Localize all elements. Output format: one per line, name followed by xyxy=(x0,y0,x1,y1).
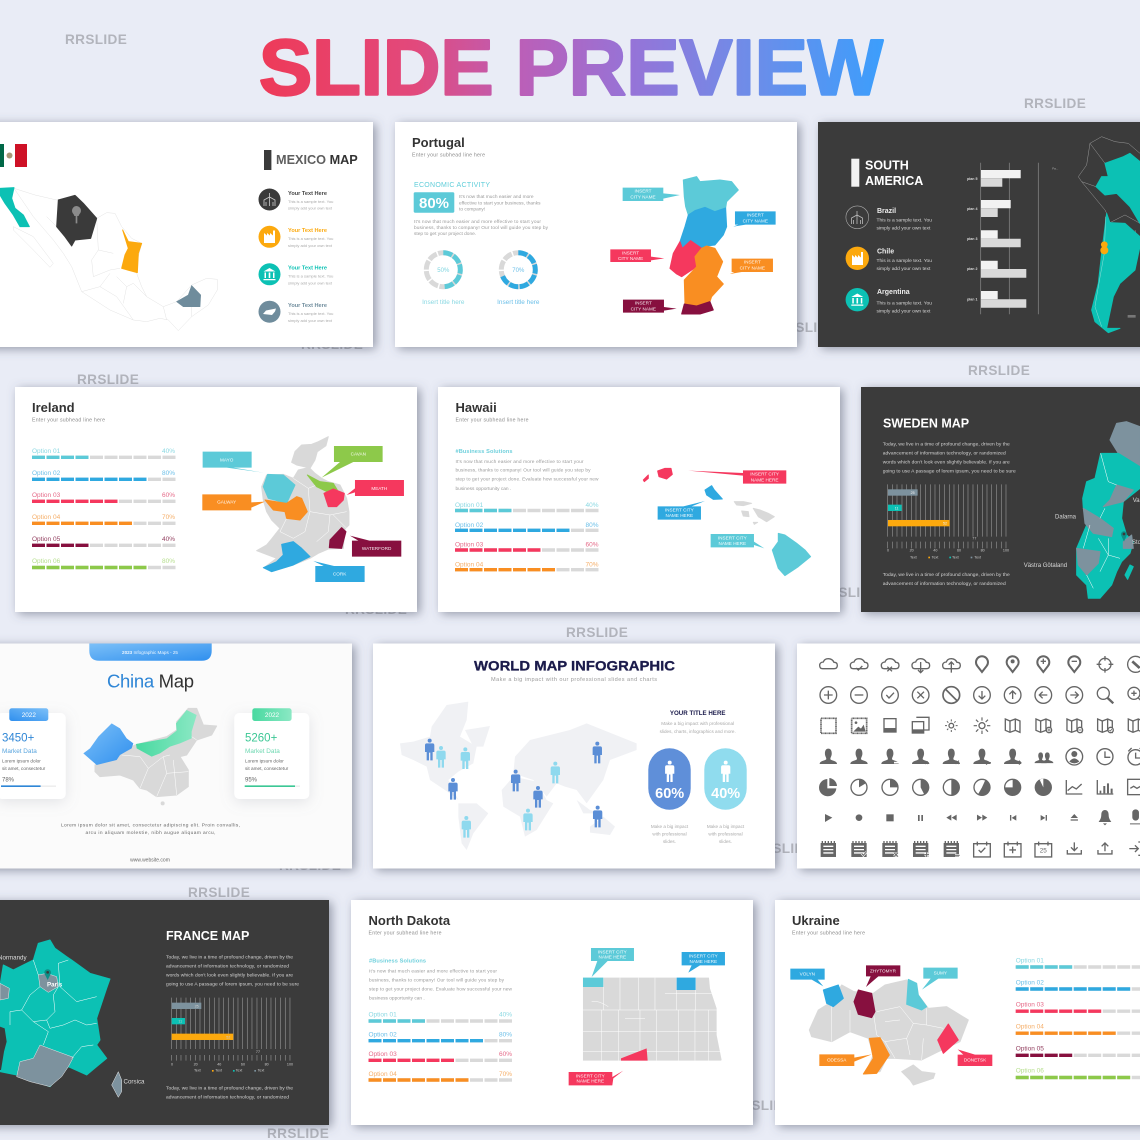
paragraph bottom xyxy=(883,572,1010,587)
option bars: 40% xyxy=(585,502,599,509)
item list with icons: This is a sample text. You xyxy=(288,199,333,204)
bar chart: 40 xyxy=(933,549,937,553)
item list with icons: This is a sample text. You xyxy=(288,236,333,241)
panel: South America xyxy=(818,122,1140,347)
map labels: Va xyxy=(1133,498,1140,504)
subhead: Enter your subhead line here xyxy=(456,418,529,424)
map: North Dakota: NAME HERE xyxy=(689,959,717,964)
heading xyxy=(851,158,923,188)
map labels: Paris xyxy=(47,982,63,989)
item list with icons: This is a sample text. You xyxy=(288,311,333,316)
item list with icons: Your Text Here xyxy=(288,228,327,234)
heading: SOUTH xyxy=(865,158,909,172)
subhead: Enter your subhead line here xyxy=(412,153,485,159)
watermarks: RRSLIDE xyxy=(775,320,837,335)
watermarks: RRSLIDE xyxy=(968,363,1030,378)
donut 70%: 70% xyxy=(512,268,525,274)
card right: Market Data xyxy=(245,748,280,755)
bar chart: plans: plan 5 xyxy=(967,177,978,181)
card right: 95% xyxy=(245,778,258,784)
card right: 2022 xyxy=(265,712,280,719)
bar chart: 11 xyxy=(895,506,899,510)
map: North Dakota: INSERT CITY xyxy=(598,949,627,954)
panel: Ireland xyxy=(15,387,417,612)
list: countries: Chile xyxy=(877,248,894,256)
map: Ireland: MEATH xyxy=(371,486,387,491)
donut 70% xyxy=(497,253,540,306)
list: countries: simply add your own text xyxy=(876,226,931,232)
bar chart: Text xyxy=(236,1069,242,1073)
map: North Dakota: NAME HERE xyxy=(576,1079,604,1084)
economic activity block: ECONOMIC ACTIVITY xyxy=(414,182,490,189)
heading: China Map xyxy=(107,671,194,692)
map: Ireland: MAYO xyxy=(220,457,234,462)
paragraph bottom xyxy=(166,1086,293,1100)
panel: Ukraine xyxy=(775,900,1140,1125)
economic activity block xyxy=(414,182,549,237)
pill 60%: with professional xyxy=(652,832,687,837)
option bars: 70% xyxy=(585,561,599,568)
card left: sit amet, consectetur xyxy=(2,766,46,771)
row 6 icons: media controls xyxy=(825,809,1140,825)
option bars: Option 06 xyxy=(32,558,61,565)
pill 40%: slides. xyxy=(719,839,732,844)
option bars: Option 04 xyxy=(1016,1023,1044,1030)
option bars: 70% xyxy=(499,1071,512,1078)
map: Ukraine xyxy=(790,965,992,1085)
paragraph: It's now that much easier and more effective to start your xyxy=(456,459,584,465)
pill 40%: Make a big impact xyxy=(707,824,745,829)
option bars xyxy=(32,448,176,568)
bar chart: Text xyxy=(910,555,917,559)
watermarks: RRSLIDE xyxy=(345,602,407,617)
map: Ukraine: DONETSK xyxy=(964,1058,987,1063)
watermarks: RRSLIDE xyxy=(188,885,250,900)
paragraph bottom: advancement of information technology, or randomized xyxy=(166,1094,289,1100)
map: Hawaii: INSERT CITY xyxy=(750,472,779,477)
map: France xyxy=(0,940,122,1097)
map: Hawaii xyxy=(643,468,811,576)
bar chart: plans: plan 1 xyxy=(967,298,978,302)
bar chart: 25 xyxy=(911,491,915,495)
subhead: Make a big impact with our professional slides and charts xyxy=(491,677,657,683)
pill 60%: Make a big impact xyxy=(651,824,689,829)
item list with icons: simply add your own text xyxy=(288,318,333,323)
subhead: Enter your subhead line here xyxy=(792,931,865,937)
option bars: 40% xyxy=(162,536,175,543)
bar chart: Text xyxy=(952,555,959,559)
bar chart: 60 xyxy=(957,549,961,553)
side title: slides, charts, infographics and more. xyxy=(660,729,736,734)
paragraph: words which don't look even slightly believable. If you are xyxy=(883,460,1010,466)
bar chart: 77 xyxy=(972,537,976,541)
map: Portugal: INSERT xyxy=(635,301,652,306)
bar chart: 20 xyxy=(910,549,914,553)
icons grid xyxy=(819,656,1140,857)
list: countries: simply add your own text xyxy=(876,266,931,272)
top tab: 2023 Infographic Maps - 25 xyxy=(122,650,178,655)
bar chart: 0 xyxy=(171,1062,173,1066)
option bars: Option 02 xyxy=(455,522,484,529)
map: Ukraine: VOLYN xyxy=(800,972,815,977)
item list with icons: simply add your own text xyxy=(288,243,333,248)
map: Portugal: CITY NAME xyxy=(618,256,643,261)
heading: MEXICO MAP xyxy=(276,153,358,167)
map labels: Corsica xyxy=(124,1078,145,1085)
map: Portugal: CITY NAME xyxy=(740,266,765,271)
map: Sweden xyxy=(1077,422,1140,598)
item list with icons: simply add your own text xyxy=(288,280,333,286)
paragraph bottom: Today, we live in a time of profound change, driven by the xyxy=(166,1086,293,1092)
map: world with people xyxy=(400,702,637,850)
map: North Dakota: INSERT CITY xyxy=(689,954,718,959)
donut 50% xyxy=(422,253,465,306)
map: Portugal xyxy=(610,177,776,314)
map: Portugal: INSERT xyxy=(747,212,764,217)
item list with icons: Your Text Here xyxy=(288,266,327,272)
bar chart: 20 xyxy=(194,1062,198,1066)
option bars: Option 01 xyxy=(368,1012,397,1019)
card left: Lorem ipsum dolor xyxy=(2,759,41,764)
list: countries xyxy=(846,206,932,315)
map: North Dakota xyxy=(569,948,725,1085)
option bars: 60% xyxy=(585,542,599,549)
map: Hawaii: NAME HERE xyxy=(718,541,746,546)
panel: China xyxy=(0,644,352,868)
option bars: Option 02 xyxy=(32,470,61,477)
list: countries: Brazil xyxy=(877,208,896,215)
economic activity block: business, thanks to company! Our tool will guide you step by xyxy=(414,225,549,231)
pill 60%: slides. xyxy=(663,839,676,844)
pill 40%: with professional xyxy=(708,832,743,837)
bar chart: plans: plan 3 xyxy=(967,237,978,241)
paragraph xyxy=(883,442,1016,475)
watermarks: RRSLIDE xyxy=(566,625,628,640)
option bars: Option 03 xyxy=(1016,1001,1044,1008)
paragraph: #Business Solutions xyxy=(456,449,512,455)
bar chart: plans: plan 4 xyxy=(967,207,978,211)
item list with icons: simply add your own text xyxy=(288,206,333,211)
heading: Hawaii xyxy=(456,400,497,415)
item list with icons xyxy=(258,188,333,323)
map: North Dakota: NAME HERE xyxy=(598,955,626,960)
watermarks: RRSLIDE xyxy=(731,1098,793,1113)
panel: World map xyxy=(373,644,775,868)
bar chart: 80 xyxy=(981,549,985,553)
option bars: 60% xyxy=(499,1051,512,1058)
donut 50%: Insert title here xyxy=(422,299,465,306)
bar chart: plans xyxy=(967,163,1038,314)
side title: Make a big impact with professional xyxy=(661,721,734,726)
card left: 78% xyxy=(2,778,15,784)
map: Ukraine: SUMY xyxy=(934,971,947,976)
option bars: Option 04 xyxy=(32,514,61,521)
map labels: Dalarna xyxy=(1055,515,1077,521)
pill 60%: 60% xyxy=(655,786,684,802)
top tab xyxy=(89,644,212,661)
list: countries: This is a sample text. You xyxy=(876,301,932,307)
paragraph: business, thanks to company! Our tool will guide you step by xyxy=(369,977,505,983)
economic activity block: It's now that much easier and more xyxy=(459,194,534,200)
subhead: Enter your subhead line here xyxy=(368,931,442,937)
side title xyxy=(660,710,736,734)
panel: France xyxy=(0,900,329,1125)
row 1 icons: clouds and pins xyxy=(820,656,1140,673)
card right: sit amet, consectetur xyxy=(245,766,289,771)
watermarks: RRSLIDE xyxy=(65,32,127,47)
map: Ireland: GALWAY xyxy=(217,500,236,505)
paragraph: going to use A passage of lorem ipsum, you need to be sure xyxy=(166,982,299,988)
bar chart: 52 xyxy=(943,522,947,526)
card left xyxy=(0,708,66,799)
heading: Ukraine xyxy=(792,913,840,928)
watermarks: RRSLIDE xyxy=(279,858,341,873)
option bars: Option 01 xyxy=(32,448,61,455)
bar chart: 52 xyxy=(226,1035,230,1039)
option bars: Option 03 xyxy=(368,1051,397,1058)
map: South America xyxy=(1052,137,1140,333)
bar chart: 77 xyxy=(256,1050,260,1054)
map: Ukraine: ZHYTOMYR xyxy=(870,968,897,973)
panel: North Dakota xyxy=(351,900,753,1125)
item list with icons: Your Text Here xyxy=(288,303,327,309)
row 4 icons: users and clocks xyxy=(820,748,1140,765)
map labels: Västra Götaland xyxy=(1024,563,1067,569)
donut 50%: 50% xyxy=(437,268,450,274)
map: Ireland: CAVAN xyxy=(351,451,366,456)
option bars: Option 04 xyxy=(368,1071,397,1078)
heading: SWEDEN MAP xyxy=(883,417,969,431)
economic activity block: effective to start your business, thanks xyxy=(459,200,541,206)
map: Mexico xyxy=(0,188,217,331)
bar chart: 25 xyxy=(195,1004,199,1008)
panel: Hawaii xyxy=(438,387,840,612)
map: Hawaii: NAME HERE xyxy=(665,513,693,518)
heading: Ireland xyxy=(32,400,75,415)
card left: Market Data xyxy=(2,748,37,755)
paragraph: Today, we live in a time of profound change, driven by the xyxy=(883,442,1010,448)
option bars: 80% xyxy=(585,522,599,529)
row 2 icons: circled symbols xyxy=(820,687,1140,703)
map: Portugal: CITY NAME xyxy=(743,218,768,223)
paragraph: step to get your project done. Evaluate how successful your new xyxy=(369,987,513,993)
option bars xyxy=(368,1012,512,1080)
bar chart: Text xyxy=(194,1069,201,1073)
list: countries: simply add your own text xyxy=(876,309,931,315)
list: countries: This is a sample text. You xyxy=(876,258,932,264)
panel: Mexico map xyxy=(0,122,373,347)
bar chart: Text xyxy=(258,1069,264,1073)
bar chart: Text xyxy=(974,555,981,559)
donut 70%: Insert title here xyxy=(497,299,540,306)
row 7 icons: notes, calendars, transfers xyxy=(821,841,1140,857)
map: North Dakota: INSERT CITY xyxy=(576,1073,605,1078)
heading: North Dakota xyxy=(368,913,451,928)
paragraph: #Business Solutions xyxy=(369,959,426,965)
option bars xyxy=(1016,957,1140,1078)
option bars: Option 01 xyxy=(455,502,484,509)
paragraph xyxy=(456,449,599,492)
panel: icon set xyxy=(797,644,1140,868)
map: South America: Fa... xyxy=(1052,166,1058,170)
map: Portugal: INSERT xyxy=(622,250,639,255)
card left: 3450+ xyxy=(2,732,35,744)
card left: 2022 xyxy=(22,712,36,719)
option bars: Option 05 xyxy=(1016,1045,1044,1052)
map: Ireland: CORK xyxy=(333,571,347,576)
option bars: Option 06 xyxy=(1016,1068,1044,1075)
map: Portugal: CITY NAME xyxy=(631,306,656,311)
body text: arcu in aliquam molestie, nibh augue aliquam arcu, xyxy=(86,830,216,836)
panel: Portugal xyxy=(395,122,797,347)
list: countries: This is a sample text. You xyxy=(876,218,932,224)
option bars: 80% xyxy=(162,470,175,477)
bar chart xyxy=(887,484,1009,559)
map labels xyxy=(0,955,145,1085)
option bars: 70% xyxy=(162,514,175,521)
option bars: 80% xyxy=(162,558,175,565)
paragraph: business opportunity can . xyxy=(369,996,425,1002)
option bars: Option 05 xyxy=(32,536,61,543)
item list with icons: This is a sample text. You xyxy=(288,274,333,279)
map: Ukraine: ODESSA xyxy=(827,1058,847,1063)
map: Ireland: WATERFORD xyxy=(362,546,392,551)
paragraph: Today, we live in a time of profound change, driven by the xyxy=(166,955,293,961)
option bars: 80% xyxy=(499,1031,512,1038)
economic activity block: step to get your project done. xyxy=(414,231,476,237)
heading: WORLD MAP INFOGRAPHIC xyxy=(474,658,675,674)
paragraph: It's now that much easier and more effective to start your xyxy=(369,968,497,974)
option bars: Option 02 xyxy=(1016,979,1044,986)
title: SLIDE PREVIEW xyxy=(259,22,883,112)
bar chart: plans: plan 2 xyxy=(967,267,978,271)
bar chart: 100 xyxy=(287,1062,293,1066)
heading xyxy=(264,150,358,170)
bar chart: 40 xyxy=(217,1062,221,1066)
paragraph: words which don't look even slightly believable. If you are xyxy=(166,973,293,979)
map: Hawaii: INSERT CITY xyxy=(718,536,747,541)
map: China xyxy=(83,708,217,805)
watermarks: RRSLIDE xyxy=(77,372,139,387)
map: Hawaii: INSERT CITY xyxy=(665,508,694,513)
paragraph bottom: advancement of information technology, or randomized xyxy=(883,581,1006,587)
watermarks: RRSLIDE xyxy=(818,585,880,600)
bar chart xyxy=(171,998,293,1073)
card right xyxy=(234,708,309,799)
map: Hawaii: NAME HERE xyxy=(751,477,778,482)
card right: Lorem ipsum dolor xyxy=(245,759,284,764)
item list with icons: Your Text Here xyxy=(288,191,327,197)
map: Portugal: CITY NAME xyxy=(630,195,656,200)
row 7 icons: notes, calendars, transfers: 25 xyxy=(1040,848,1047,855)
bar chart: Text xyxy=(215,1069,222,1073)
economic activity block: It's now that much easier and more effective to start your xyxy=(414,219,541,225)
map: Ireland xyxy=(202,437,404,582)
heading: Portugal xyxy=(412,135,465,150)
watermarks: RRSLIDE xyxy=(301,337,363,352)
pill 40%: 40% xyxy=(711,786,740,802)
flag of Mexico xyxy=(0,144,27,167)
paragraph: step to get your project done. Evaluate how successful your new xyxy=(456,477,599,483)
map: Portugal: INSERT xyxy=(634,189,652,194)
watermarks: RRSLIDE xyxy=(1024,96,1086,111)
paragraph bottom: Today, we live in a time of profound change, driven by the xyxy=(883,572,1010,578)
map labels xyxy=(1024,498,1140,569)
option bars: Option 03 xyxy=(32,492,61,499)
bar chart: 11 xyxy=(178,1020,182,1024)
body text xyxy=(61,822,240,836)
list: countries: Argentina xyxy=(877,289,910,296)
paragraph: business opportunity can . xyxy=(456,486,511,492)
row 5 icons: pies and charts xyxy=(819,778,1140,796)
heading: AMERICA xyxy=(865,174,923,188)
paragraph: business, thanks to company! Our tool will guide you step by xyxy=(456,468,591,474)
option bars: Option 01 xyxy=(1016,957,1044,964)
website: www.website.com xyxy=(130,858,170,864)
option bars: 40% xyxy=(162,448,175,455)
paragraph xyxy=(369,959,513,1002)
bar chart: Text xyxy=(932,555,938,559)
paragraph: advancement of information technology, or randomized xyxy=(166,963,289,969)
option bars xyxy=(455,502,599,570)
body text: Lorem ipsum dolor sit amet, consectetur adipiscing elit. Proin convallis, xyxy=(61,822,240,828)
watermarks: RRSLIDE xyxy=(752,841,814,856)
map: Portugal: INSERT xyxy=(744,260,761,265)
option bars: Option 03 xyxy=(455,542,484,549)
card right: 5260+ xyxy=(245,732,278,744)
row 3 icons: frames and maps xyxy=(821,717,1140,734)
bar chart: 80 xyxy=(265,1062,269,1066)
side title: YOUR TITLE HERE xyxy=(670,710,726,717)
pill 40% xyxy=(704,748,747,844)
bar chart: 60 xyxy=(241,1062,245,1066)
subhead: Enter your subhead line here xyxy=(32,418,105,424)
paragraph: advancement of information technology, or randomized xyxy=(883,451,1006,457)
heading: FRANCE MAP xyxy=(166,929,249,943)
option bars: 40% xyxy=(499,1012,512,1019)
paragraph: going to use A passage of lorem ipsum, you need to be sure xyxy=(883,469,1016,475)
option bars: 60% xyxy=(162,492,175,499)
bar chart: 100 xyxy=(1003,549,1009,553)
bar chart: 0 xyxy=(887,549,889,553)
pill 60% xyxy=(648,748,691,844)
panel: Sweden xyxy=(861,387,1140,612)
paragraph xyxy=(166,955,299,988)
economic activity block: to company! xyxy=(459,206,485,212)
economic activity block: 80% xyxy=(419,195,449,212)
option bars: Option 02 xyxy=(368,1031,397,1038)
option bars: Option 04 xyxy=(455,561,484,568)
